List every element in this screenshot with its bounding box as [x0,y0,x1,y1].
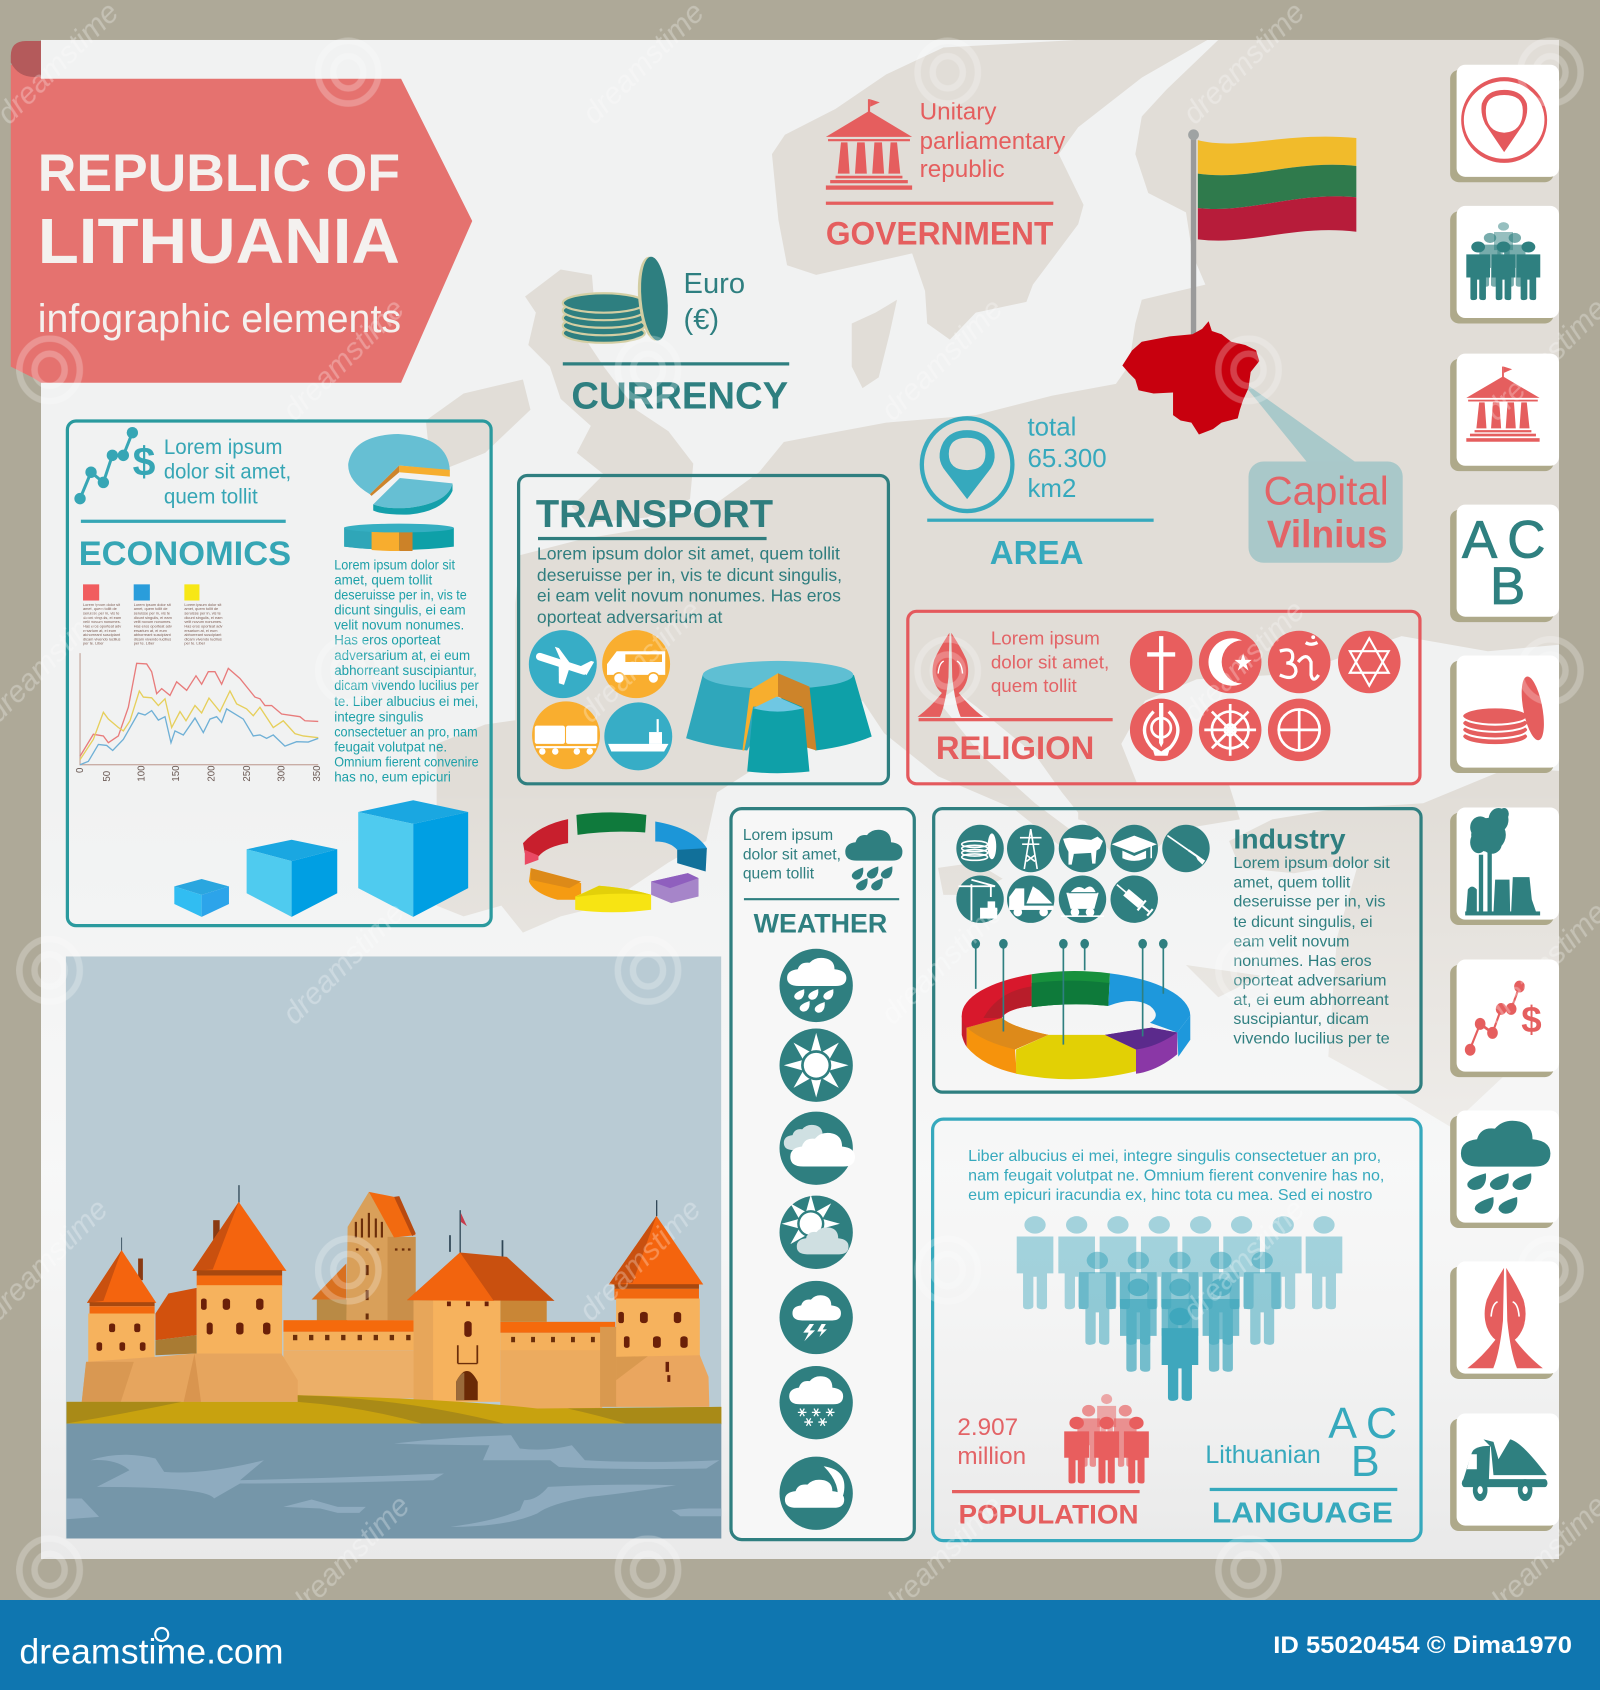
icon: crescent and star [1199,631,1261,693]
right tower [600,1200,709,1407]
icon: thunderstorm [780,1281,853,1354]
industry text: deseruisse per in, vis [1233,894,1385,911]
water [67,1424,722,1539]
transport heading: TRANSPORT [536,493,773,536]
industry text: suscipiantur, dicam [1233,1011,1369,1028]
legend: ersarium at, ei eum [134,628,167,633]
industry text: nonumes. Has eros [1233,953,1372,970]
icon: crane [956,875,1004,923]
watermark overlay: dreamstime [276,896,411,1031]
transport text: deseruisse per in, vis te dicunt singulis, [537,565,842,585]
legend: dicam vivendo lucilius [83,636,121,641]
sidebar card: transport [1450,1413,1559,1531]
industry text: te dicunt singulis, ei [1233,914,1373,931]
currency block [563,256,789,417]
weather text: Lorem ipsum [743,827,833,844]
sidebar card: language: C [1507,510,1545,569]
icon: syringe [1101,866,1168,933]
illustration: Trakai castle [66,956,722,1539]
legend: velit novum nonumes. [83,619,121,624]
icon: rain [780,949,853,1022]
economics body text: Has eros oporteat [334,633,441,648]
panel: transport [519,475,888,784]
legend: Has eros oporteat adv [184,623,223,628]
currency block: (€) [684,304,719,336]
legend: ersarium at, ei eum [83,628,116,633]
area block: 65.300 [1027,445,1107,473]
legend: abhorreant suscipiant [83,632,121,637]
economics body text: Lorem ipsum dolor sit [334,557,455,572]
sidebar card: population [1450,206,1559,323]
icon: dump truck [1007,875,1054,923]
sidebar card: weather [1450,1110,1559,1228]
legend: abhorreant suscipiant [184,632,222,637]
line chart: 150 [171,765,182,782]
legend: dicam vivendo lucilius [184,636,222,641]
industry text: Industry [1233,824,1346,855]
language heading [1210,1488,1397,1529]
government block: parliamentary [920,128,1066,155]
line chart: 0 [75,767,86,773]
legend: dicunt singulis, ei eam [134,615,172,620]
economics body text: velit novum nonumes. [334,618,464,633]
industry text: vivendo lucilius per te [1233,1031,1390,1048]
transport text [537,544,842,627]
watermark overlay: dreamstime [573,1193,708,1327]
legend: dicunt singulis, ei eam [83,615,121,620]
watermark overlay: dreamstime [282,1489,416,1624]
people pictogram [1017,1216,1342,1401]
language label and letters: Lithuanian [1205,1442,1321,1469]
transport text: Lorem ipsum dolor sit amet, quem tollit [537,544,840,564]
religion text [991,628,1109,696]
left base [82,1354,298,1402]
title banner: REPUBLIC OF [38,144,400,203]
economics body text: adversarium at, ei eum [334,648,470,663]
left hall [138,1220,220,1355]
economics body text: te. Liber albucius ei mei, [334,694,478,709]
religion text: Lorem ipsum [991,628,1100,649]
panel: economics [67,421,491,926]
religion heading [919,718,1113,766]
industry text: Lorem ipsum dolor sit [1233,855,1390,872]
economics body text: abhorreant suscipiantur, [334,663,477,678]
watermark overlay: dreamstime [1177,1193,1311,1327]
line chart: 250 [242,765,253,782]
watermark overlay: dreamstime [1177,0,1311,131]
icon: sun behind cloud [780,1195,853,1269]
capital callout pointer [1240,380,1361,466]
line chart: 50 [102,770,113,782]
economics body text: integre singulis [334,709,424,724]
donut chart with pins [962,939,1190,1079]
industry text: eam velit novum [1233,934,1349,951]
population text: nam feugait volutpat ne. Omnium fierent convenire has no, [968,1168,1384,1185]
area block [922,414,1154,572]
watermark overlay: dreamstime [576,0,711,131]
economics intro text: Lorem ipsum [164,436,282,459]
legend: Lorem ipsum dolor sit [184,602,222,607]
icon: pylon [1007,825,1054,872]
legend [83,584,223,646]
legend: Lorem ipsum dolor sit [83,602,121,607]
legend: velit novum nonumes. [184,619,222,624]
legend: Has eros oporteat adv [83,623,121,628]
watermark overlay: dreamstime [875,896,1009,1031]
icon: sun [780,1029,853,1102]
sidebar card: language: B [1490,557,1525,616]
language heading: LANGUAGE [1212,1497,1393,1529]
icon: circled cross [1268,699,1330,761]
economics intro text: dolor sit amet, [164,461,291,484]
capital callout [1249,461,1403,563]
legend: per te. Liber [134,641,155,646]
icon: coins [956,825,1004,872]
government block [826,99,1066,252]
weather text: dolor sit amet, [743,846,841,863]
watermark overlay: dreamstime [573,594,708,729]
icon: graduation cap [1111,825,1158,872]
segmented cylinder chart [344,524,454,551]
economics body text: has no, eum epicuri [334,770,451,785]
icon: rain cloud [845,830,902,890]
icon: cross [1130,631,1192,693]
legend: Has eros oporteat adv [134,623,172,628]
curtain walls [283,1320,615,1409]
legend: amet, quem tollit de [184,606,218,611]
language label and letters [1205,1400,1397,1486]
panel: weather [731,809,914,1540]
economics heading: ECONOMICS [79,535,291,573]
sidebar card: government [1450,354,1559,471]
language label and letters: A [1328,1400,1357,1448]
currency block: Euro [684,268,745,300]
legend: per te. Liber [83,641,104,646]
legend: per te. Liber [184,641,206,646]
legend: amet, quem tollit de [83,606,117,611]
capital callout: Capital [1264,470,1389,514]
sidebar card: economics [1450,960,1559,1077]
industry text [1233,824,1390,1048]
legend: ersarium at, ei eum [184,628,218,633]
icon: bus [602,630,670,698]
area block: km2 [1027,475,1076,503]
icon: star of David [1338,631,1401,693]
population text: Liber albucius ei mei, integre singulis consectetuer an pro, [968,1148,1381,1165]
panel: population and language [933,1119,1421,1541]
transport text: ei eam velit novum nonumes. Has eros [537,586,841,606]
population text: eum epicuri iracundia ex, hinc tota cu mea. Sed ei nostro [968,1187,1373,1204]
title banner [11,41,472,383]
icon: dharma wheel [1199,699,1261,761]
cube bar chart [174,800,468,917]
area block: total [1027,414,1076,442]
icon: snow [780,1366,853,1439]
area block: AREA [990,535,1084,572]
ground [67,1395,722,1424]
icon: plane [529,630,597,698]
economics body text: Omnium fierent convenire [334,755,479,770]
legend: seruisse per in, vis te [184,611,221,616]
sidebar card: language: A [1462,510,1498,569]
cylinder chart [686,661,872,773]
weather text: quem tollit [743,866,815,883]
icon: om [1268,631,1330,693]
weather heading: WEATHER [754,909,887,939]
government block: GOVERNMENT [826,216,1054,252]
title banner: LITHUANIA [38,206,400,277]
line chart: 200 [207,765,218,782]
icon: ship [604,702,672,770]
icon: khanda [1130,699,1192,761]
small ring chart segments [523,812,707,912]
population figure: million [957,1443,1026,1470]
legend: abhorreant suscipiant [134,632,172,637]
industry text: amet, quem tollit [1233,874,1351,891]
footer bar [0,1600,1600,1690]
legend: seruisse per in, vis te [134,611,170,616]
watermark overlay: dreamstime [1177,594,1311,729]
icon: red people group [1064,1394,1149,1484]
economics body text [334,557,479,785]
religion text: quem tollit [991,675,1078,696]
government block: republic [920,156,1005,183]
economics body text: dicam vivendo lucilius per [334,678,479,693]
icon: growth chart with dollar [74,427,156,504]
watermark overlay: dreamstime [875,292,1009,427]
line chart: 300 [277,765,288,782]
Lithuania map shape [1122,321,1259,434]
legend: Lorem ipsum dolor sit [134,602,172,607]
icon: cow [1059,825,1106,872]
industry text: oporteat adversarium [1233,972,1387,989]
sidebar card: language [1450,505,1559,622]
big left tower [192,1185,286,1355]
legend: seruisse per in, vis te [83,611,119,616]
title banner: infographic elements [38,297,401,341]
watermark overlay: dreamstime [276,292,411,427]
sidebar card: currency [1450,656,1559,773]
icon: mine cart [1059,875,1106,923]
population figure: 2.907 [957,1414,1018,1441]
population heading: POPULATION [958,1499,1139,1529]
language label and letters: B [1351,1438,1380,1486]
icon: growth chart with dollar: $ [133,438,156,484]
watermark overlay: dreamstime [875,1489,1009,1624]
economics body text: deseruisse per in, vis te [334,587,467,602]
government block: Unitary [920,99,997,126]
pie chart [348,434,453,515]
left tower [87,1238,156,1364]
economics body text: consectetuer an pro, nam [334,724,478,739]
economics body text: amet, quem tollit [334,572,433,587]
line chart [75,653,323,782]
religion heading: RELIGION [936,730,1094,766]
panel: religion [908,611,1420,784]
transport text: oporteat adversarium at [537,607,723,627]
legend: dicunt singulis, ei eam [184,615,222,620]
legend: velit novum nonumes. [134,619,171,624]
icon: train tanker [532,701,600,769]
economics intro text: quem tollit [164,485,258,508]
sidebar card: industry [1450,808,1559,925]
flag of Lithuania on pole [1188,129,1356,354]
currency block: CURRENCY [571,375,788,417]
line chart: 350 [312,765,323,782]
population text [968,1148,1384,1204]
icon: rifle [1162,825,1210,872]
icon: praying hands [918,633,983,717]
industry text: at, ei eum abhorreant [1233,992,1389,1009]
capital callout: Vilnius [1267,514,1388,557]
icon: cloud and moon [780,1457,853,1530]
gatehouse [407,1210,555,1402]
population figure [957,1414,1026,1470]
footer bar: dreamstime.com [19,1632,284,1672]
legend: dicam vivendo lucilius [134,636,171,641]
sidebar card: economics: $ [1521,999,1542,1040]
economics intro text [164,436,291,508]
footer bar: ID 55020454 © Dima1970 [1273,1633,1572,1659]
religion text: dolor sit amet, [991,651,1109,672]
economics body text: dicunt singulis, ei eam [334,603,466,618]
back tower [312,1192,416,1321]
icon: cloudy [780,1112,855,1185]
panel: industry [934,809,1421,1092]
sidebar card: religion [1450,1261,1559,1379]
weather text [743,827,841,883]
sidebar card: location [1450,65,1559,182]
line chart: 100 [136,765,147,782]
legend: amet, quem tollit de [134,606,168,611]
economics body text: feugait volutpat ne. [334,739,447,754]
language label and letters: C [1366,1400,1397,1448]
